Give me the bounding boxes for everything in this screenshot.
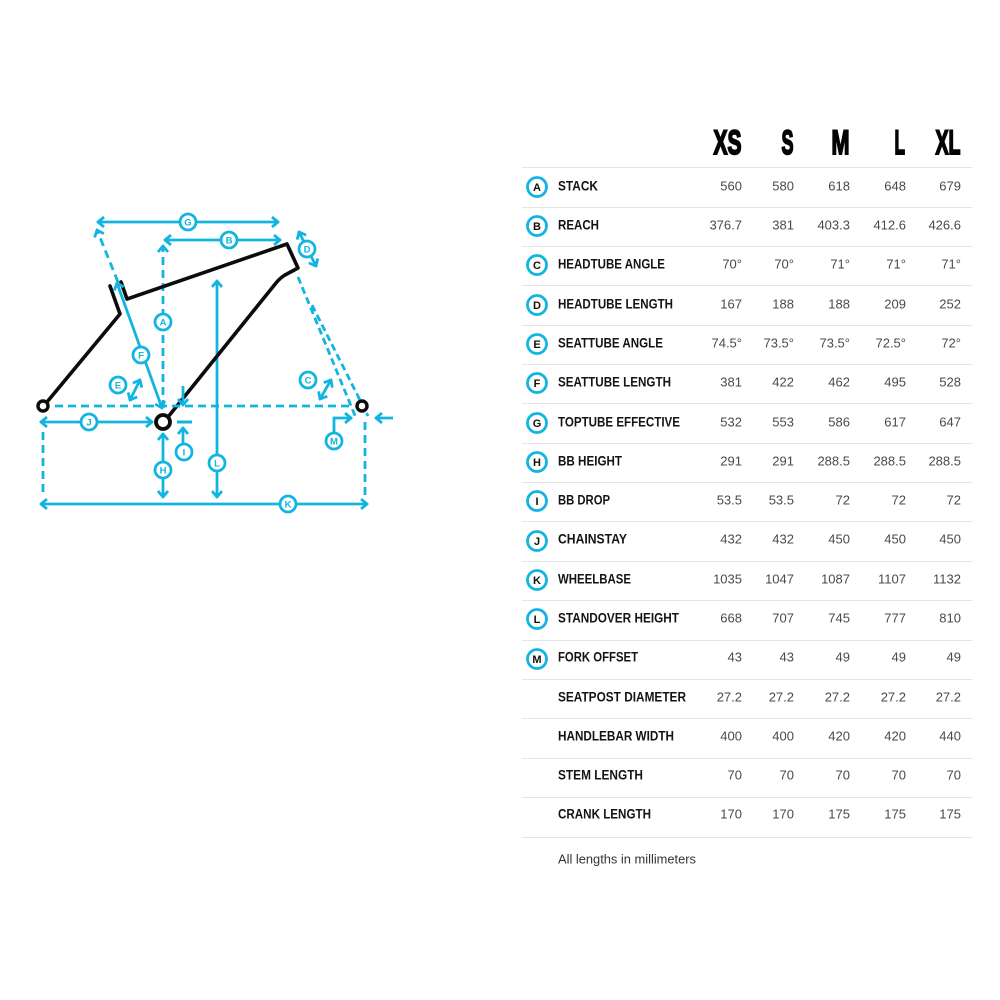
dimension C: headtube angle <box>300 372 331 399</box>
row: headtube length: 188 <box>772 296 794 311</box>
row: fork offset: 43 <box>728 649 742 664</box>
dimension D: headtube length: D <box>304 244 311 256</box>
row: bb height: 291 <box>772 453 794 468</box>
dimension K: wheelbase <box>41 422 367 512</box>
dimension A: stack: A <box>160 318 167 328</box>
dimension M: fork offset <box>326 418 393 449</box>
row: headtube angle: 71° <box>886 256 906 271</box>
dimension B: reach: B <box>226 236 233 246</box>
row: toptube effective <box>528 414 961 432</box>
row: bb height <box>528 452 961 472</box>
row: crank length: 170 <box>772 806 794 821</box>
row: standover height: 810 <box>939 610 961 625</box>
row: chainstay: 432 <box>772 531 794 546</box>
row: seatpost diameter: 27.2 <box>825 689 850 704</box>
row: seatpost diameter: 27.2 <box>717 689 742 704</box>
row: crank length <box>558 806 961 821</box>
dimension M: fork offset: M <box>330 436 338 448</box>
row: seattube length: 528 <box>939 374 961 389</box>
row: bb drop: 72 <box>836 492 850 507</box>
axle baseline dashed <box>55 405 352 407</box>
row: handlebar width <box>558 728 961 743</box>
row: reach: REACH <box>558 217 599 232</box>
row: wheelbase: K <box>533 575 541 587</box>
row: seattube length: SEATTUBE LENGTH <box>558 374 671 389</box>
row: headtube length: HEADTUBE LENGTH <box>558 296 673 311</box>
row: chainstay: J <box>534 536 540 548</box>
dimension B: reach <box>165 232 280 248</box>
size headers: L <box>894 124 905 162</box>
row: reach: 381 <box>772 217 794 232</box>
dimension D: headtube length <box>299 232 316 266</box>
row: handlebar width: 440 <box>939 728 961 743</box>
row: seatpost diameter: 27.2 <box>881 689 906 704</box>
dimension G: top tube effective: G <box>184 218 192 228</box>
row: handlebar width: 420 <box>828 728 850 743</box>
row: seatpost diameter: 27.2 <box>769 689 794 704</box>
row: seattube angle: 73.5° <box>819 335 850 350</box>
row: reach: 376.7 <box>709 217 742 232</box>
row: toptube effective: 647 <box>939 414 961 429</box>
row: headtube length: D <box>533 300 541 312</box>
front axle <box>357 401 367 411</box>
row: stem length: STEM LENGTH <box>558 767 643 782</box>
dimension L: standover height <box>209 281 225 497</box>
row: reach: B <box>533 221 541 233</box>
row: handlebar width: 420 <box>884 728 906 743</box>
row: seattube length: F <box>534 378 541 390</box>
bottom bracket <box>156 415 170 429</box>
row: bb drop: BB DROP <box>558 492 610 507</box>
row: fork offset: 49 <box>892 649 906 664</box>
row: reach <box>528 216 961 236</box>
row: seatpost diameter: SEATPOST DIAMETER <box>558 689 686 704</box>
row: reach: 426.6 <box>928 217 961 232</box>
row: toptube effective: TOPTUBE EFFECTIVE <box>558 414 680 429</box>
row: bb drop: 72 <box>892 492 906 507</box>
row: crank length: 175 <box>939 806 961 821</box>
dimension I: BB drop: I <box>183 448 185 458</box>
row: wheelbase: 1087 <box>821 571 850 586</box>
geometry table <box>522 168 972 838</box>
row: toptube effective: 586 <box>828 414 850 429</box>
row: seattube length: 381 <box>720 374 742 389</box>
row: fork offset: 49 <box>836 649 850 664</box>
dimension J: chainstay <box>41 414 152 430</box>
row: fork offset <box>528 649 961 668</box>
row: stem length: 70 <box>780 767 794 782</box>
row: stack: 560 <box>720 178 742 193</box>
dimension E: seattube angle <box>110 377 140 400</box>
row: seattube angle: SEATTUBE ANGLE <box>558 335 663 350</box>
row: standover height: 707 <box>772 610 794 625</box>
dimension F: seattube length: F <box>138 350 144 362</box>
dimension G: top tube effective <box>97 214 278 282</box>
row: seattube angle: E <box>533 339 541 351</box>
row: toptube effective: 617 <box>884 414 906 429</box>
row: standover height: 745 <box>828 610 850 625</box>
row: bb height: 288.5 <box>817 453 850 468</box>
row: reach: 403.3 <box>817 217 850 232</box>
row: seattube length: 422 <box>772 374 794 389</box>
row: crank length: 170 <box>720 806 742 821</box>
row: headtube angle: 70° <box>722 256 742 271</box>
frame outline <box>47 244 298 417</box>
row: crank length: 175 <box>884 806 906 821</box>
dimension F: seattube length <box>117 283 162 408</box>
row: fork offset: M <box>532 654 542 666</box>
row: stack: 580 <box>772 178 794 193</box>
row: standover height: 777 <box>884 610 906 625</box>
row: crank length: 175 <box>828 806 850 821</box>
row: standover height: L <box>534 614 541 626</box>
row: stack <box>528 178 961 196</box>
row: headtube angle: 71° <box>830 256 850 271</box>
row: seattube angle: 74.5° <box>711 335 742 350</box>
row: chainstay: 450 <box>828 531 850 546</box>
row: headtube length: 167 <box>720 296 742 311</box>
row: headtube angle: 70° <box>774 256 794 271</box>
size headers: XS <box>714 124 742 162</box>
row: wheelbase: 1047 <box>765 571 794 586</box>
row: headtube length: 209 <box>884 296 906 311</box>
row: seattube angle: 72° <box>941 335 961 350</box>
row: headtube angle: HEADTUBE ANGLE <box>558 256 665 271</box>
row: crank length: CRANK LENGTH <box>558 806 651 821</box>
row: bb height: 288.5 <box>873 453 906 468</box>
row: seattube length <box>528 374 961 392</box>
row: headtube length: 252 <box>939 296 961 311</box>
footnote: All lengths in millimeters <box>558 852 696 866</box>
size headers <box>714 124 960 162</box>
row: toptube effective: G <box>533 418 541 430</box>
dimension H: BB height <box>155 434 171 497</box>
dimension J: chainstay: J <box>86 418 92 428</box>
row: chainstay: 450 <box>884 531 906 546</box>
row: wheelbase: 1035 <box>713 571 742 586</box>
row: stem length: 70 <box>728 767 742 782</box>
row: fork offset: 49 <box>947 649 961 664</box>
row: wheelbase: 1132 <box>933 571 961 586</box>
row: wheelbase <box>528 570 961 590</box>
row: bb drop <box>528 492 961 510</box>
row: seatpost diameter <box>558 689 961 704</box>
dimension A: stack <box>155 246 171 408</box>
dimension C: headtube angle: C <box>305 376 312 386</box>
row: standover height: STANDOVER HEIGHT <box>558 610 680 625</box>
row: standover height: 668 <box>720 610 742 625</box>
size headers: M <box>832 124 850 162</box>
dimension E: seattube angle: E <box>115 380 121 392</box>
dimension I: BB drop <box>176 386 192 460</box>
row: seatpost diameter: 27.2 <box>936 689 961 704</box>
row: bb height: 288.5 <box>928 453 961 468</box>
row: stack: 679 <box>939 178 961 193</box>
row: stem length: 70 <box>836 767 850 782</box>
size headers: S <box>782 124 794 162</box>
row: wheelbase: 1107 <box>878 571 906 586</box>
row: headtube length <box>528 296 961 314</box>
row: bb height: BB HEIGHT <box>558 453 623 468</box>
row: bb height: 291 <box>720 453 742 468</box>
row: fork offset: FORK OFFSET <box>558 649 639 664</box>
rear axle <box>38 401 48 411</box>
row: bb drop: 72 <box>947 492 961 507</box>
row: stack: 618 <box>828 178 850 193</box>
row: stack: 648 <box>884 178 906 193</box>
row: stem length: 70 <box>892 767 906 782</box>
size headers: XL <box>936 124 960 162</box>
row: chainstay: 450 <box>939 531 961 546</box>
row: bb height: H <box>533 457 541 469</box>
row: bb drop: I <box>535 496 539 508</box>
row: handlebar width: HANDLEBAR WIDTH <box>558 728 674 743</box>
row separators <box>522 168 972 838</box>
diagram: bike frame geometry <box>38 214 393 512</box>
dimension H: BB height: H <box>160 466 167 476</box>
dimension L: standover height: L <box>214 458 220 470</box>
row: seattube length: 495 <box>884 374 906 389</box>
row: fork offset: 43 <box>780 649 794 664</box>
row: standover height <box>528 610 961 628</box>
row: seattube angle: 73.5° <box>763 335 794 350</box>
row: stem length: 70 <box>947 767 961 782</box>
row: headtube angle: 71° <box>941 256 961 271</box>
row: stack: A <box>533 182 541 194</box>
row: stem length <box>558 767 961 782</box>
row: bb drop: 53.5 <box>717 492 742 507</box>
row: toptube effective: 553 <box>772 414 794 429</box>
row: chainstay <box>528 531 961 550</box>
row: stack: STACK <box>558 178 598 193</box>
row: reach: 412.6 <box>873 217 906 232</box>
dimension K: wheelbase: K <box>285 500 292 510</box>
row: headtube angle <box>528 256 961 274</box>
row: handlebar width: 400 <box>772 728 794 743</box>
row: seattube angle <box>528 334 961 354</box>
row: seattube length: 462 <box>828 374 850 389</box>
row: headtube angle: C <box>533 260 541 272</box>
row: seattube angle: 72.5° <box>875 335 906 350</box>
row: bb drop: 53.5 <box>769 492 794 507</box>
row: chainstay: CHAINSTAY <box>558 531 627 546</box>
row: handlebar width: 400 <box>720 728 742 743</box>
row: headtube length: 188 <box>828 296 850 311</box>
fork dashed lines <box>298 277 368 418</box>
row: wheelbase: WHEELBASE <box>558 571 631 586</box>
row: toptube effective: 532 <box>720 414 742 429</box>
row: chainstay: 432 <box>720 531 742 546</box>
